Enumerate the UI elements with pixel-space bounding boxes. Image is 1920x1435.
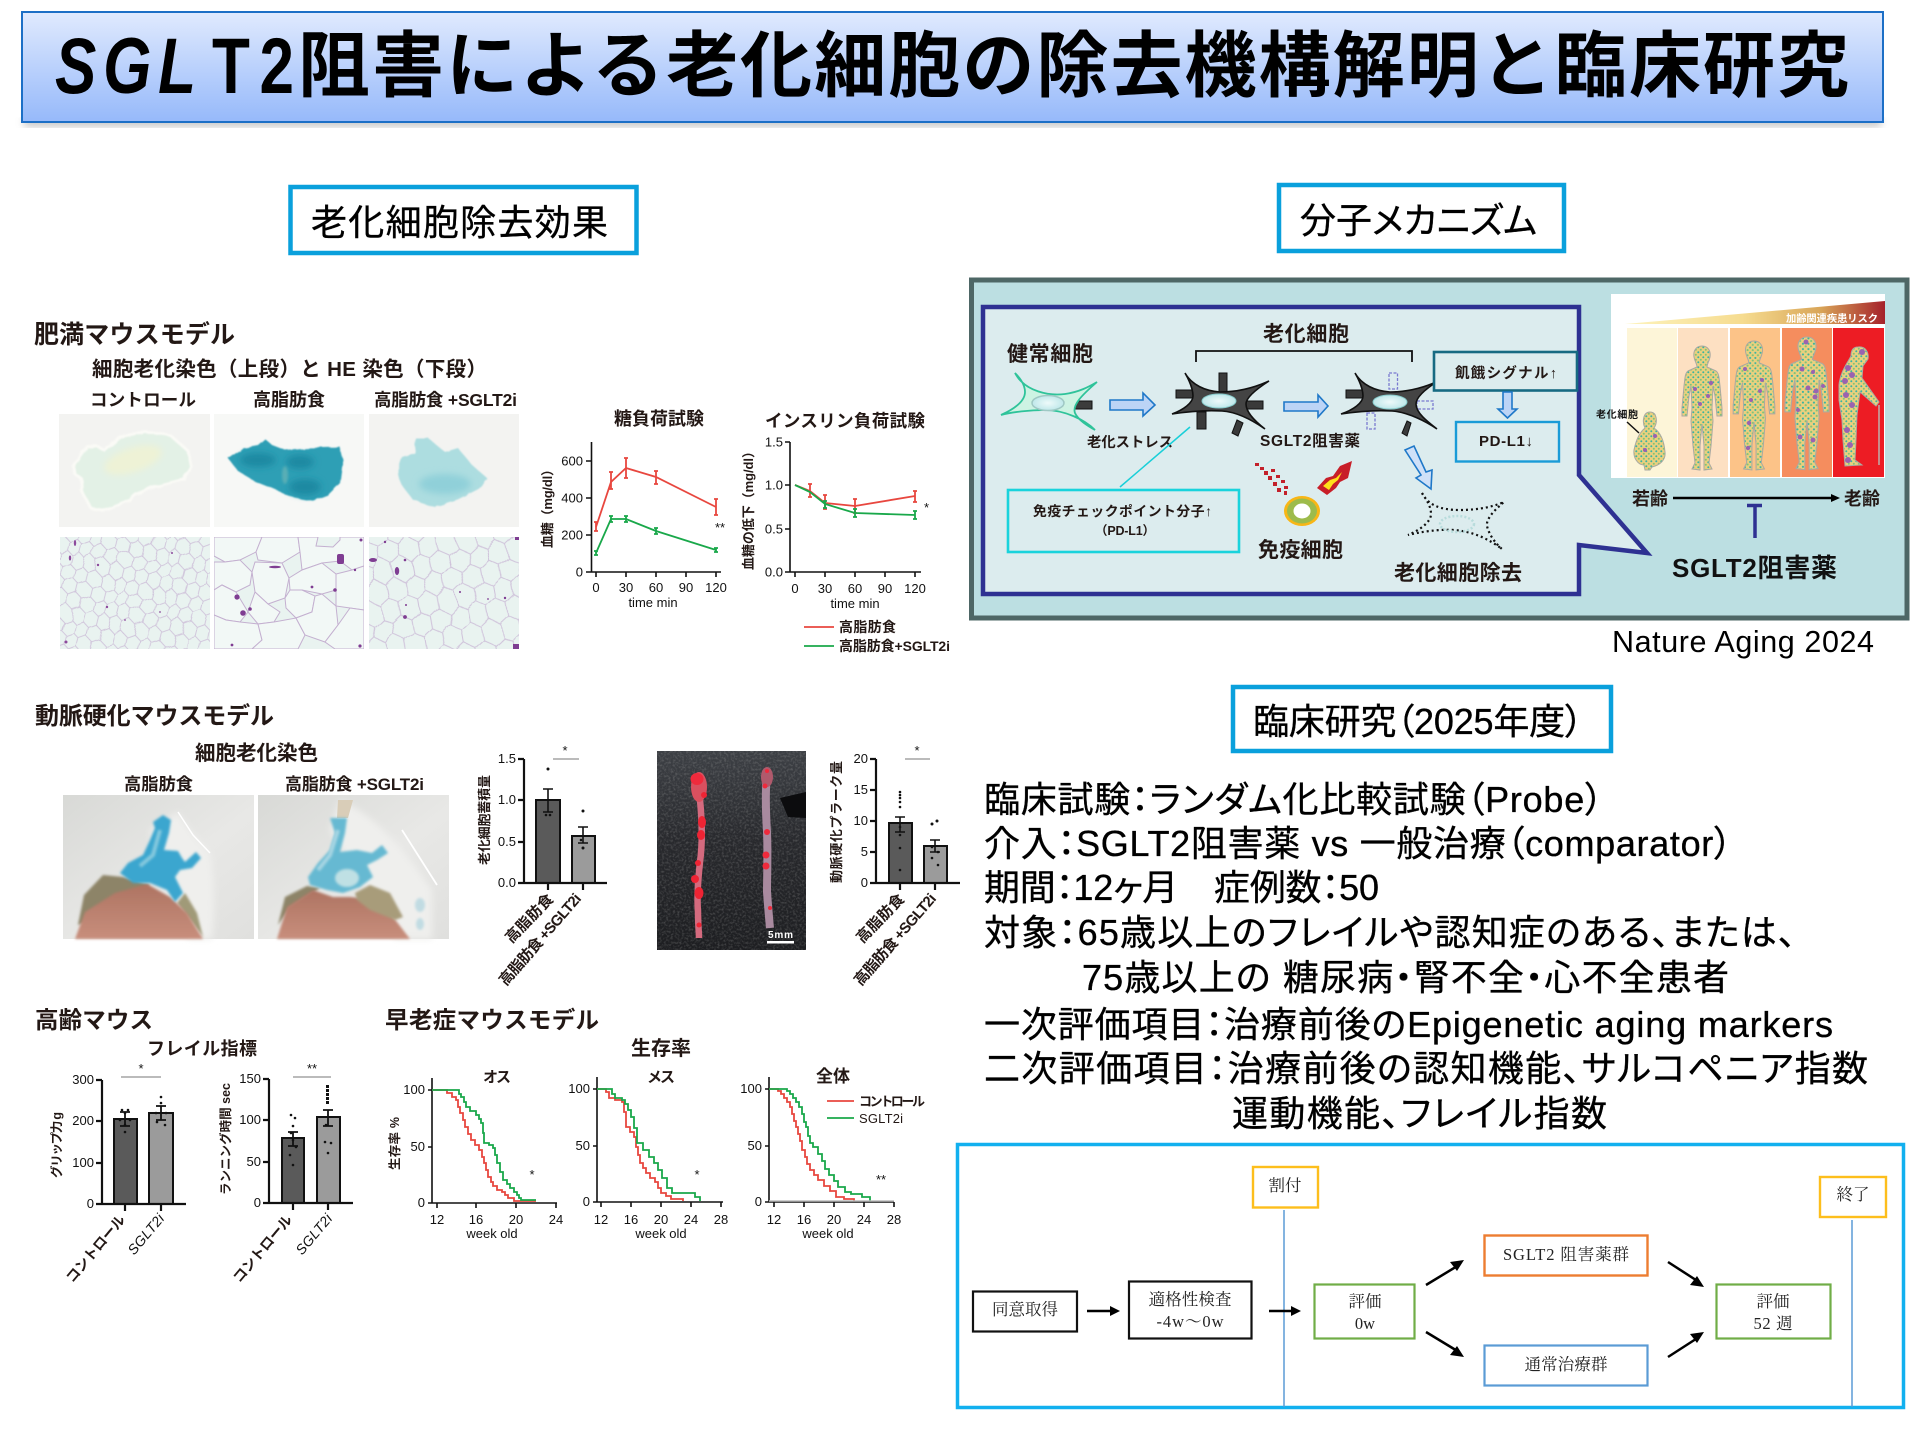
chart: grip strength: [49, 1061, 186, 1286]
heading: senescent cell removal effect: 老化細胞除去効果: [311, 202, 608, 243]
chart: atherosclerosis plaque volume: 動脈硬化プラーク量: [829, 761, 844, 883]
chart: glucose tolerance test: time min: [628, 595, 678, 610]
chart: survival all: 20: [827, 1212, 841, 1227]
icon: senescent cell: [1172, 373, 1269, 436]
chart: running time: コントロール: [230, 1212, 295, 1286]
panel: mechanism diagram: [972, 280, 1907, 618]
legend: obese mouse charts: 高脂肪食+SGLT2i: [839, 638, 950, 654]
box: consent: [973, 1292, 1077, 1332]
chart: atherosclerosis plaque volume: 15: [854, 782, 868, 797]
timeline: allocation: 割付: [1268, 1176, 1302, 1195]
chart: survival female: *: [694, 1167, 700, 1182]
column labels: [90, 390, 517, 410]
chart: atherosclerosis plaque volume: 20: [854, 751, 868, 766]
legend: survival: [827, 1094, 925, 1126]
labels: senescent cell and healthy cell: 健常細胞: [1007, 343, 1093, 366]
text block: clinical trial outline: 介入：SGLT2阻害薬 vs 一般治療（comparator）: [984, 823, 1732, 864]
frame: [958, 1144, 1904, 1408]
chart: survival male: オス: [483, 1069, 511, 1086]
chart: survival male: 生存率 %: [387, 1117, 402, 1170]
panel: progeria mouse survival: [385, 1006, 925, 1241]
heading: molecular mechanism: [1279, 185, 1564, 251]
arrows: randomisation branches: [1426, 1260, 1704, 1357]
chart: glucose tolerance test: 600: [561, 454, 583, 468]
timeline: end: [1820, 1177, 1886, 1407]
subheading: survival: 生存率: [631, 1037, 691, 1060]
chart: senescent cell accumulation: 1.5: [498, 751, 516, 766]
photos: HE staining of fat tissue: [60, 537, 519, 649]
chart: insulin tolerance test: 0.0: [765, 564, 783, 580]
arrow: stress: [1110, 393, 1155, 416]
box: usual care arm: [1484, 1346, 1648, 1386]
chart: senescent cell accumulation: 老化細胞蓄積量: [477, 775, 492, 865]
arrow: starvation to PD-L1: [1498, 392, 1517, 418]
chart: glucose tolerance test: 30: [619, 580, 633, 595]
connector: checkpoint: [1120, 427, 1190, 487]
chart: glucose tolerance test: 0: [576, 564, 583, 580]
text block: clinical trial outline: 二次評価項目：治療前後の認知機能、サルコペニア指数: [984, 1048, 1868, 1089]
label: senescent cell pointer: [1596, 408, 1639, 433]
chart: survival male: 50: [411, 1139, 425, 1154]
column labels: [124, 774, 424, 794]
legend: survival: SGLT2i: [859, 1111, 903, 1126]
box: consent: 同意取得: [992, 1300, 1058, 1319]
box: eligibility screening: [1129, 1282, 1252, 1338]
labels: senescent cell and healthy cell: 老化細胞: [1263, 323, 1349, 346]
column labels: 高脂肪食: [124, 774, 193, 794]
chart: survival male: week old: [465, 1226, 518, 1241]
chart: running time: **: [307, 1061, 317, 1076]
chart: senescent cell accumulation: 0.0: [498, 875, 516, 890]
chart: survival female: 24: [684, 1212, 698, 1227]
chart: atherosclerosis plaque volume: 高脂肪食: [853, 890, 908, 947]
chart: insulin tolerance test: *: [924, 500, 929, 515]
chart: senescent cell accumulation: [477, 743, 607, 989]
chart: glucose tolerance test: **: [715, 520, 725, 535]
text block: clinical trial outline: 期間：12ヶ月 症例数：50: [984, 867, 1379, 908]
text block: clinical trial outline: 臨床試験：ランダム化比較試験（Probe）: [984, 779, 1603, 820]
timeline: end: 終了: [1836, 1185, 1870, 1204]
column labels: 高脂肪食 +SGLT2i: [374, 390, 517, 410]
legend: obese mouse charts: [804, 619, 950, 654]
chart: survival all: 50: [748, 1138, 762, 1153]
chart: survival all: 16: [797, 1212, 811, 1227]
chart: survival female: 100: [568, 1081, 590, 1096]
chart: grip strength: SGLT2i: [124, 1210, 168, 1258]
heading: aged mice: 高齢マウス: [35, 1007, 153, 1033]
chart: survival female: 28: [714, 1212, 728, 1227]
heading: clinical research: [1233, 687, 1611, 751]
text block: clinical trial outline: 一次評価項目：治療前後のEpigenetic aging markers: [984, 1004, 1833, 1045]
chart: grip strength: 0: [87, 1196, 94, 1211]
text block: clinical trial outline: 75歳以上の 糖尿病・腎不全・心不全患者: [1082, 957, 1729, 998]
chart: senescent cell accumulation: 高脂肪食: [502, 890, 557, 947]
chart: survival male: 100: [403, 1082, 425, 1097]
chart: survival female: 12: [594, 1212, 608, 1227]
illustration: aging body figures: [1611, 294, 1885, 478]
box: immune checkpoint molecule: [1008, 490, 1239, 552]
chart: survival all: 全体: [816, 1067, 850, 1086]
chart: senescent cell accumulation: 1.0: [498, 792, 516, 807]
chart: insulin tolerance test: [741, 411, 929, 611]
title banner: 阻害による老化細胞の除去機構解明と臨床研究: [298, 27, 1849, 107]
chart: running time: [218, 1061, 353, 1286]
chart: insulin tolerance test: 90: [878, 581, 892, 596]
panel: atherosclerosis mouse model: [35, 702, 960, 989]
column labels: 高脂肪食: [253, 390, 325, 410]
chart: running time: SGLT2i: [292, 1210, 336, 1258]
chart: grip strength: グリップ力 g: [49, 1112, 64, 1178]
chart: grip strength: 200: [72, 1113, 94, 1128]
chart: grip strength: *: [138, 1061, 144, 1076]
chart: survival all: week old: [801, 1226, 854, 1241]
box: eligibility screening: 適格性検査: [1148, 1290, 1232, 1309]
text block: clinical trial outline: [984, 779, 1868, 1134]
chart: survival all: 24: [857, 1212, 871, 1227]
chart: insulin tolerance test: 1.0: [765, 478, 783, 492]
chart: survival female: [568, 1069, 728, 1241]
chart: glucose tolerance test: 60: [649, 580, 663, 595]
aging axis: 老齢: [1844, 489, 1880, 509]
label: immune cell: 免疫細胞: [1258, 539, 1343, 562]
icon: senescent cell with reduced checkpoint: [1341, 373, 1438, 436]
panel: obese mouse model: [34, 320, 950, 669]
column labels: コントロール: [90, 390, 196, 410]
box: SGLT2 inhibitor arm: [1484, 1236, 1648, 1276]
chart: running time: 100: [239, 1112, 261, 1127]
photo: aorta high-fat diet: [63, 795, 254, 939]
heading: atherosclerosis model: 動脈硬化マウスモデル: [35, 702, 274, 730]
icon: removed cell: [1408, 493, 1504, 549]
box: starvation signal: 飢餓シグナル↑: [1455, 364, 1557, 382]
panel: aged mice frailty: [35, 1007, 353, 1286]
chart: insulin tolerance test: 30: [818, 581, 832, 596]
chart: survival all: 100: [740, 1081, 762, 1096]
chart: glucose tolerance test: 糖負荷試験: [614, 409, 704, 429]
label: senescent cell removal: 老化細胞除去: [1394, 562, 1522, 585]
subheading: frailty index: フレイル指標: [147, 1038, 257, 1059]
chart: grip strength: 100: [72, 1155, 94, 1170]
box: starvation signal: [1434, 352, 1577, 390]
chart: senescent cell accumulation: 0.5: [498, 834, 516, 849]
chart: insulin tolerance test: インスリン負荷試験: [765, 411, 926, 431]
box: baseline evaluation: 0w: [1355, 1314, 1375, 1333]
chart: running time: 50: [247, 1154, 261, 1169]
chart: survival male: 24: [549, 1212, 563, 1227]
chart: insulin tolerance test: 60: [848, 581, 862, 596]
photo: dissected aortas with plaque: [657, 751, 806, 950]
icon: immune cell: [1284, 496, 1320, 526]
box: usual care arm: 通常治療群: [1524, 1355, 1608, 1374]
chart: survival all: 12: [767, 1212, 781, 1227]
chart: atherosclerosis plaque volume: 10: [854, 813, 868, 828]
chart: survival male: [387, 1069, 563, 1241]
box: immune checkpoint molecule: 免疫チェックポイント分子↑: [1033, 503, 1212, 519]
box: week 52 evaluation: [1716, 1284, 1830, 1338]
text block: clinical trial outline: 運動機能、フレイル指数: [1232, 1093, 1607, 1134]
chart: insulin tolerance test: 1.5: [765, 434, 783, 450]
subheading: staining: 細胞老化染色（上段）と HE 染色（下段）: [92, 358, 487, 381]
outer frame: [972, 280, 1907, 618]
heading: progeria model: 早老症マウスモデル: [385, 1006, 599, 1033]
label: senescent cell pointer: 老化細胞: [1596, 408, 1638, 421]
timeline: allocation: [1253, 1167, 1318, 1407]
photos: senescence staining of fat tissue: [59, 414, 519, 527]
chart: survival male: 20: [509, 1212, 523, 1227]
chart: glucose tolerance test: 120: [705, 580, 727, 595]
column labels: 高脂肪食 +SGLT2i: [285, 774, 424, 794]
arrow: consent to screening: [1087, 1306, 1120, 1316]
box: baseline evaluation: [1314, 1284, 1414, 1338]
chart: survival male: *: [529, 1167, 535, 1182]
heading: molecular mechanism: 分子メカニズム: [1300, 200, 1537, 241]
chart: survival female: 0: [583, 1194, 590, 1209]
chart: senescent cell accumulation: 高脂肪食 +SGLT2i: [495, 890, 585, 989]
labels: aging stress and SGLT2 inhibitor: 老化ストレス: [1087, 434, 1173, 451]
chart: insulin tolerance test: time min: [830, 596, 880, 611]
chart: survival all: 28: [887, 1212, 901, 1227]
title banner: SGL: [55, 23, 196, 111]
box: PD-L1 down: PD-L1↓: [1479, 433, 1533, 450]
chart: atherosclerosis plaque volume: *: [914, 743, 920, 758]
chart: glucose tolerance test: 200: [561, 528, 583, 542]
chart: survival male: 0: [418, 1195, 425, 1210]
chart: atherosclerosis plaque volume: 高脂肪食 +SGLT2i: [850, 890, 940, 989]
icon: inhibition symbol: [1747, 506, 1762, 538]
box: SGLT2 inhibitor arm: SGLT2 阻害薬群: [1503, 1245, 1630, 1264]
chart: running time: 0: [254, 1195, 261, 1210]
chart: glucose tolerance test: 0: [592, 580, 600, 595]
labels: senescent cell and healthy cell: [1007, 323, 1412, 366]
chart: grip strength: コントロール: [63, 1212, 128, 1286]
heading: obese mouse model: 肥満マウスモデル: [34, 320, 235, 349]
chart: glucose tolerance test: 400: [561, 490, 583, 506]
chart: survival all: [740, 1067, 901, 1241]
chart: glucose tolerance test: 血糖（mg/dl）: [540, 463, 555, 548]
box: baseline evaluation: 評価: [1348, 1292, 1382, 1311]
chart: glucose tolerance test: 90: [679, 580, 693, 595]
aging axis: [1632, 489, 1880, 509]
labels: aging stress and SGLT2 inhibitor: [1087, 431, 1360, 451]
chart: survival male: 16: [469, 1212, 483, 1227]
text block: clinical trial outline: 対象：65歳以上のフレイルや認知症のある、または、: [984, 912, 1796, 953]
box: immune checkpoint molecule: （PD-L1）: [1095, 524, 1155, 538]
chart: atherosclerosis plaque volume: [829, 743, 960, 989]
chart: survival female: week old: [634, 1226, 687, 1241]
heading: senescent cell removal effect: [290, 187, 636, 253]
chart: insulin tolerance test: 0: [791, 581, 799, 596]
chart: running time: ランニング時間 sec: [218, 1083, 233, 1195]
illustration: aging body figures: 加齢関連疾患リスク: [1786, 312, 1878, 325]
chart: survival male: 12: [430, 1212, 444, 1227]
chart: insulin tolerance test: 血糖の低下（mg/dl）: [741, 445, 756, 570]
arrow: to SGLT2 inhibitor: [1284, 395, 1328, 417]
chart: senescent cell accumulation: *: [562, 743, 568, 758]
chart: survival female: 20: [654, 1212, 668, 1227]
speech bubble panel: [983, 307, 1647, 594]
arrow: screening to baseline: [1269, 1306, 1301, 1316]
title banner: T2: [212, 23, 294, 111]
photo: aorta high-fat diet plus SGLT2i: [258, 795, 449, 939]
heading: clinical research: 臨床研究（2025年度）: [1253, 701, 1583, 742]
chart: running time: 150: [239, 1071, 261, 1086]
chart: atherosclerosis plaque volume: 0: [861, 875, 868, 890]
chart: atherosclerosis plaque volume: 5: [861, 844, 868, 859]
label: SGLT2 inhibitor: SGLT2阻害薬: [1672, 553, 1837, 583]
aging axis: 若齢: [1632, 489, 1668, 509]
legend: obese mouse charts: 高脂肪食: [839, 619, 896, 635]
box: week 52 evaluation: 52 週: [1754, 1314, 1792, 1333]
icon: healthy cell: [1001, 373, 1097, 430]
chart: insulin tolerance test: 0.5: [765, 522, 783, 536]
chart: insulin tolerance test: 120: [904, 581, 926, 596]
box: PD-L1 down: [1456, 422, 1559, 462]
chart: survival all: **: [876, 1172, 886, 1187]
box: week 52 evaluation: 評価: [1756, 1292, 1790, 1311]
title banner: [22, 12, 1883, 126]
chart: grip strength: 300: [72, 1072, 94, 1087]
chart: survival female: メス: [647, 1069, 675, 1086]
chart: glucose tolerance test: [540, 409, 727, 610]
citation: Nature Aging 2024: [1612, 625, 1874, 659]
box: eligibility screening: -4w〜0w: [1156, 1312, 1224, 1331]
arrow: senescent cell clearance: [1405, 446, 1432, 489]
photo: dissected aortas with plaque: 5mm: [768, 930, 793, 941]
labels: aging stress and SGLT2 inhibitor: SGLT2阻害薬: [1260, 431, 1360, 450]
chart: survival all: 0: [755, 1194, 762, 1209]
subheading: senescence staining: 細胞老化染色: [195, 742, 318, 765]
icon: immune attack: [1255, 461, 1352, 495]
chart: survival female: 16: [624, 1212, 638, 1227]
legend: survival: コントロール: [859, 1094, 925, 1109]
chart: survival female: 50: [576, 1138, 590, 1153]
flowchart: trial design: [958, 1144, 1904, 1408]
